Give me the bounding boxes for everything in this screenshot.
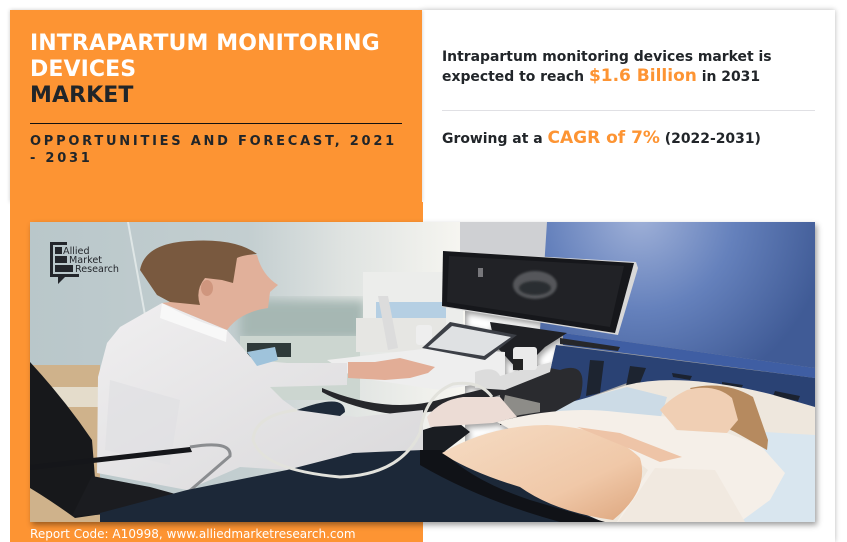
patient waistband: [420, 450, 605, 522]
trousers: [100, 401, 603, 522]
title rule: [30, 123, 402, 124]
chair arm: [93, 443, 232, 490]
bed and pillow: [520, 380, 815, 522]
panel: orange header panel: [10, 10, 422, 202]
subtitle: - 2031: [30, 151, 93, 166]
footer report code: Report Code: A10998, www.alliedmarketresearch.com: [30, 527, 356, 541]
title: MARKET: [30, 83, 134, 108]
text block: market value: expected to reach $1.6 Billion in 2031: [442, 66, 760, 86]
subtitle: [30, 134, 397, 166]
subtitle: OPPORTUNITIES AND FORECAST, 2021: [30, 134, 397, 149]
text block: market value: [442, 49, 772, 86]
white cabinet and shelf: [356, 272, 463, 352]
patient hand: [577, 427, 682, 462]
patient belly: [442, 425, 642, 520]
logo: Allied Market Research: [50, 242, 119, 284]
logo: Allied Market Research: Research: [75, 264, 119, 275]
ultrasound console: [322, 322, 582, 425]
title: [30, 31, 380, 108]
blue wall: [540, 222, 815, 415]
doctor hand: [348, 358, 435, 380]
patient head: [660, 385, 768, 450]
doctor head: [140, 241, 278, 330]
logo: Allied Market Research: Market: [69, 255, 102, 266]
seated person foreground: [30, 362, 174, 518]
doctor coat: [97, 303, 423, 490]
glove: [427, 397, 517, 427]
text block: CAGR: Growing at a CAGR of 7% (2022-2031): [442, 128, 761, 148]
ultrasound monitor: [442, 251, 638, 372]
panel: right white card: [422, 10, 835, 542]
patient shirt: [497, 410, 785, 522]
divider: [442, 110, 815, 111]
title: INTRAPARTUM MONITORING: [30, 31, 380, 56]
text block: market value: Intrapartum monitoring devices market is: [442, 49, 772, 65]
transducer cable: [289, 382, 494, 478]
photo: ultrasound scene: [28, 221, 821, 529]
photo background wall: [30, 222, 550, 522]
panel: orange lower backing: [10, 202, 423, 542]
title: DEVICES: [30, 57, 136, 82]
logo: Allied Market Research: Allied: [63, 246, 90, 257]
